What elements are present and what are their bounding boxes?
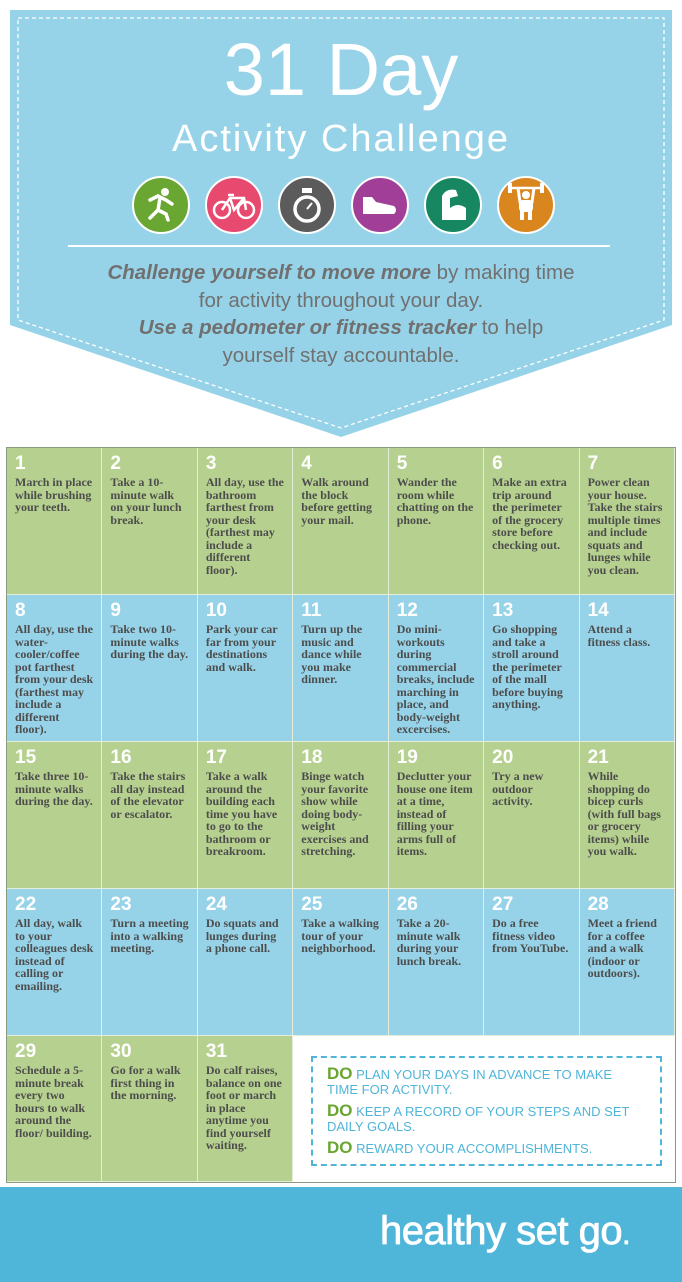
logo: healthy set go.	[380, 1209, 630, 1253]
subtitle text: Challenge yourself to move more by making time	[107, 261, 575, 284]
calendar grid: Go shopping and take a stroll around the perimeter of the mall before buying anything.	[492, 622, 563, 711]
calendar grid: Power clean your house. Take the stairs multiple times and include squats and lunges while you clean.	[588, 475, 662, 576]
calendar grid: 20	[492, 747, 513, 768]
calendar grid: 25	[301, 894, 322, 915]
calendar grid: 27	[492, 894, 513, 915]
calendar grid: Walk around the block before getting your mail.	[301, 475, 372, 526]
calendar grid: Go for a walk first thing in the morning.	[110, 1063, 181, 1102]
icon: weightlifter	[498, 177, 554, 233]
calendar grid: 1	[15, 453, 26, 474]
calendar grid	[6, 447, 676, 1183]
calendar grid: Turn a meeting into a walking meeting.	[110, 916, 189, 955]
DO tips box	[311, 1056, 662, 1166]
calendar grid: Wander the room while chatting on the phone.	[397, 475, 473, 526]
calendar grid: Do mini-workouts during commercial breaks, include marching in place, and body-weight excercises.	[397, 622, 474, 736]
calendar grid: Take the stairs all day instead of the elevator or escalator.	[110, 769, 185, 820]
calendar grid: Attend a fitness class.	[588, 622, 650, 648]
calendar grid: While shopping do bicep curls (with full bags or grocery items) while you walk.	[588, 769, 661, 858]
calendar grid: 30	[110, 1041, 132, 1062]
calendar grid: Meet a friend for a coffee and a walk (indoor or outdoors).	[588, 916, 657, 980]
calendar grid: 29	[15, 1041, 36, 1062]
calendar grid: Do squats and lunges during a phone call.	[206, 916, 279, 955]
icon: shoe	[352, 177, 408, 233]
subtitle text	[107, 261, 575, 366]
calendar grid: 16	[110, 747, 132, 768]
calendar grid: 8	[15, 600, 26, 621]
icon: stopwatch	[279, 177, 335, 233]
calendar grid: 24	[206, 894, 227, 915]
tip 1	[327, 1064, 612, 1097]
calendar grid: Schedule a 5-minute break every two hours to walk around the floor/ building.	[15, 1063, 92, 1140]
calendar grid: Make an extra trip around the perimeter of the grocery store before checking out.	[492, 475, 567, 552]
calendar grid: Declutter your house one item at a time, instead of filling your arms full of items.	[397, 769, 473, 858]
subtitle text: Use a pedometer or fitness tracker to help	[139, 316, 543, 339]
calendar grid: 7	[588, 453, 598, 474]
tip 2	[327, 1101, 630, 1134]
tip 1: DO PLAN YOUR DAYS IN ADVANCE TO MAKE	[327, 1064, 612, 1083]
calendar grid: 10	[206, 600, 227, 621]
calendar grid: 4	[301, 453, 312, 474]
calendar grid: 21	[588, 747, 609, 768]
title: Activity Challenge	[172, 118, 510, 160]
calendar grid: 18	[301, 747, 322, 768]
icon: bike	[206, 177, 262, 233]
icons row	[132, 176, 555, 234]
calendar grid: Take a walk around the building each time you have to go to the bathroom or breakroom.	[206, 769, 277, 858]
calendar grid: Take three 10-minute walks during the day.	[15, 769, 93, 808]
tip 2: DAILY GOALS.	[327, 1119, 415, 1134]
calendar grid: All day, use the water-cooler/coffee pot farthest from your desk (farthest may include a different floor).	[15, 622, 93, 736]
calendar grid: 6	[492, 453, 503, 474]
calendar grid: 13	[492, 600, 513, 621]
calendar grid: 14	[588, 600, 609, 621]
calendar grid: Park your car far from your destinations and walk.	[206, 622, 278, 674]
title	[172, 28, 510, 160]
icon: runner	[133, 177, 189, 233]
calendar grid: 26	[397, 894, 418, 915]
calendar grid: Take a 10-minute walk on your lunch break.	[110, 475, 182, 526]
calendar grid: 5	[397, 453, 407, 474]
calendar grid: Take a walking tour of your neighborhood.	[301, 916, 379, 955]
tip 2: DO KEEP A RECORD OF YOUR STEPS AND SET	[327, 1101, 629, 1120]
calendar grid: All day, walk to your colleagues desk instead of calling or emailing.	[15, 916, 93, 992]
subtitle text: for activity throughout your day.	[199, 288, 483, 312]
header banner	[10, 10, 672, 437]
icon: muscle	[425, 177, 481, 233]
calendar grid: Turn up the music and dance while you make dinner.	[301, 622, 362, 686]
calendar grid: 3	[206, 453, 216, 474]
calendar grid: 19	[397, 747, 418, 768]
calendar grid: 23	[110, 894, 132, 915]
calendar grid: All day, use the bathroom farthest from your desk (farthest may include a different floor).	[206, 475, 284, 576]
calendar grid: 11	[301, 600, 321, 621]
calendar grid: Try a new outdoor activity.	[492, 769, 543, 808]
calendar grid: 15	[15, 747, 36, 768]
calendar grid: 31	[206, 1041, 227, 1062]
calendar grid: 22	[15, 894, 36, 915]
calendar grid: 28	[588, 894, 609, 915]
calendar grid: 17	[206, 747, 227, 768]
title: 31 Day	[224, 28, 458, 111]
calendar grid: Take a 20-minute walk during your lunch break.	[397, 916, 461, 968]
footer	[0, 1187, 682, 1282]
calendar grid: Do a free fitness video from YouTube.	[492, 916, 568, 955]
calendar grid: 12	[397, 600, 418, 621]
calendar grid: Do calf raises, balance on one foot or march in place anytime you find yourself waiting.	[206, 1063, 282, 1152]
tip 1: TIME FOR ACTIVITY.	[327, 1082, 452, 1097]
calendar grid: March in place while brushing your teeth.	[15, 475, 92, 514]
calendar grid: 9	[110, 600, 121, 621]
calendar grid: Take two 10-minute walks during the day.	[110, 622, 188, 661]
calendar grid: Binge watch your favorite show while doing body-weight exercises and stretching.	[301, 769, 369, 858]
calendar grid: 2	[110, 453, 121, 474]
tip 3: DO REWARD YOUR ACCOMPLISHMENTS.	[327, 1138, 592, 1157]
subtitle text: yourself stay accountable.	[222, 344, 460, 366]
